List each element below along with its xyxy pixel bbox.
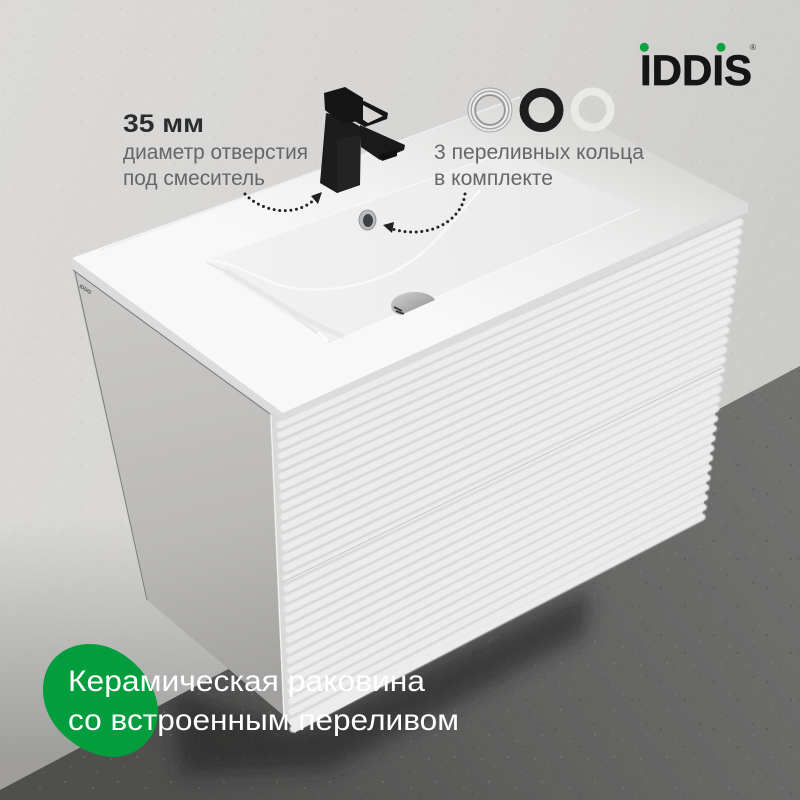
- callout: overflow rings: [434, 141, 644, 190]
- callout: faucet hole diameter: под смеситель: [123, 167, 265, 190]
- caption: Керамическая раковина: [68, 665, 425, 698]
- icon: transparent overflow ring: [470, 90, 510, 130]
- caption: [68, 665, 459, 737]
- backsplash edge: [100, 97, 520, 250]
- drawer gap: [283, 368, 722, 582]
- logo: IDDIS: ®: [750, 43, 756, 52]
- callout: overflow rings: в комплекте: [434, 167, 553, 190]
- ribbed cabinet front: [279, 220, 740, 733]
- logo: IDDIS: IDDIS: [640, 47, 752, 95]
- cabinet side panel: [73, 270, 296, 733]
- ceramic countertop: [72, 92, 748, 421]
- rib lines: [280, 222, 740, 729]
- icon: black faucet: [320, 87, 405, 193]
- callout: faucet hole diameter: [123, 110, 308, 190]
- green blob: [43, 644, 158, 757]
- icon: white overflow ring: [574, 92, 610, 128]
- callout: overflow rings: 3 переливных кольца: [434, 141, 644, 164]
- floor: [0, 366, 800, 800]
- caption: со встроенным переливом: [68, 704, 459, 737]
- basin: [203, 150, 640, 343]
- callout: faucet hole diameter: диаметр отверстия: [123, 141, 308, 164]
- callout: faucet hole diameter: 35 мм: [123, 110, 204, 138]
- arrow: to faucet: [245, 192, 322, 211]
- arrow: to overflow hole: [383, 194, 465, 233]
- side logo mark: IDDIS: [78, 284, 93, 296]
- icon: black overflow ring: [524, 92, 559, 128]
- drain: [391, 292, 435, 315]
- overflow hole: [359, 210, 376, 230]
